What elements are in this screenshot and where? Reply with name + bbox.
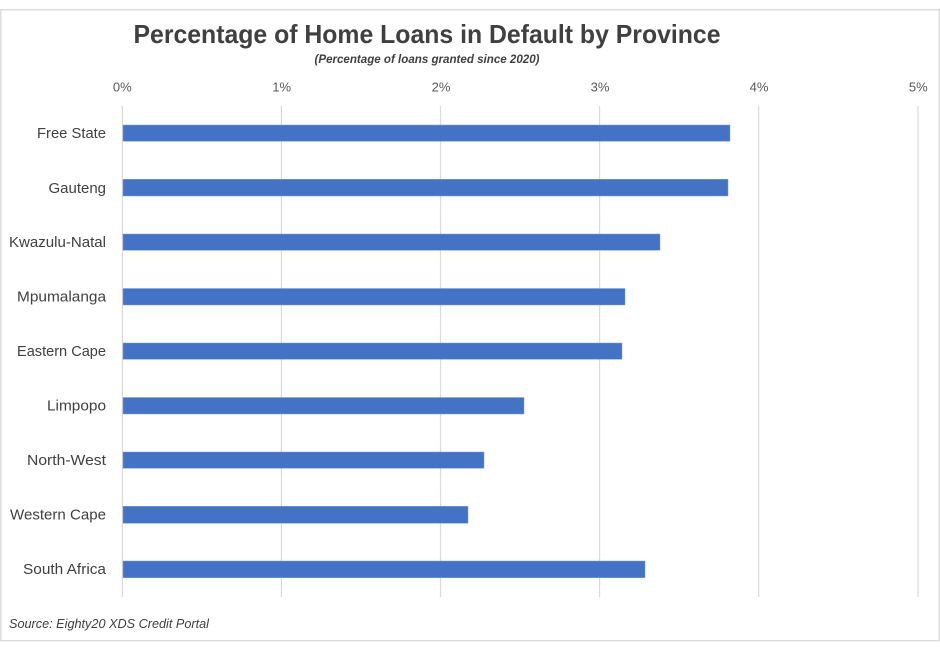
subtitle: (Percentage of loans granted since 2020) xyxy=(314,52,540,66)
province labels xyxy=(9,126,107,578)
province labels: North-West xyxy=(27,453,106,469)
x axis labels: 0% xyxy=(113,80,132,94)
province labels: Limpopo xyxy=(47,398,106,414)
province labels: Western Cape xyxy=(10,508,106,524)
province labels: Eastern Cape xyxy=(17,344,106,360)
province labels: Mpumalanga xyxy=(17,290,107,306)
province labels: Gauteng xyxy=(48,181,106,197)
x axis labels xyxy=(113,80,928,94)
x axis labels: 1% xyxy=(272,80,292,94)
province labels: Kwazulu-Natal xyxy=(9,235,106,251)
x axis labels: 2% xyxy=(432,80,451,94)
province labels: Free State xyxy=(37,126,106,142)
title: Percentage of Home Loans in Default by Province xyxy=(134,19,720,49)
x axis labels: 3% xyxy=(591,80,610,94)
source note: Source: Eighty20 XDS Credit Portal xyxy=(9,617,210,631)
x axis labels: 4% xyxy=(750,80,769,94)
x axis labels: 5% xyxy=(909,80,928,94)
province labels: South Africa xyxy=(23,562,107,578)
bars xyxy=(123,125,730,578)
